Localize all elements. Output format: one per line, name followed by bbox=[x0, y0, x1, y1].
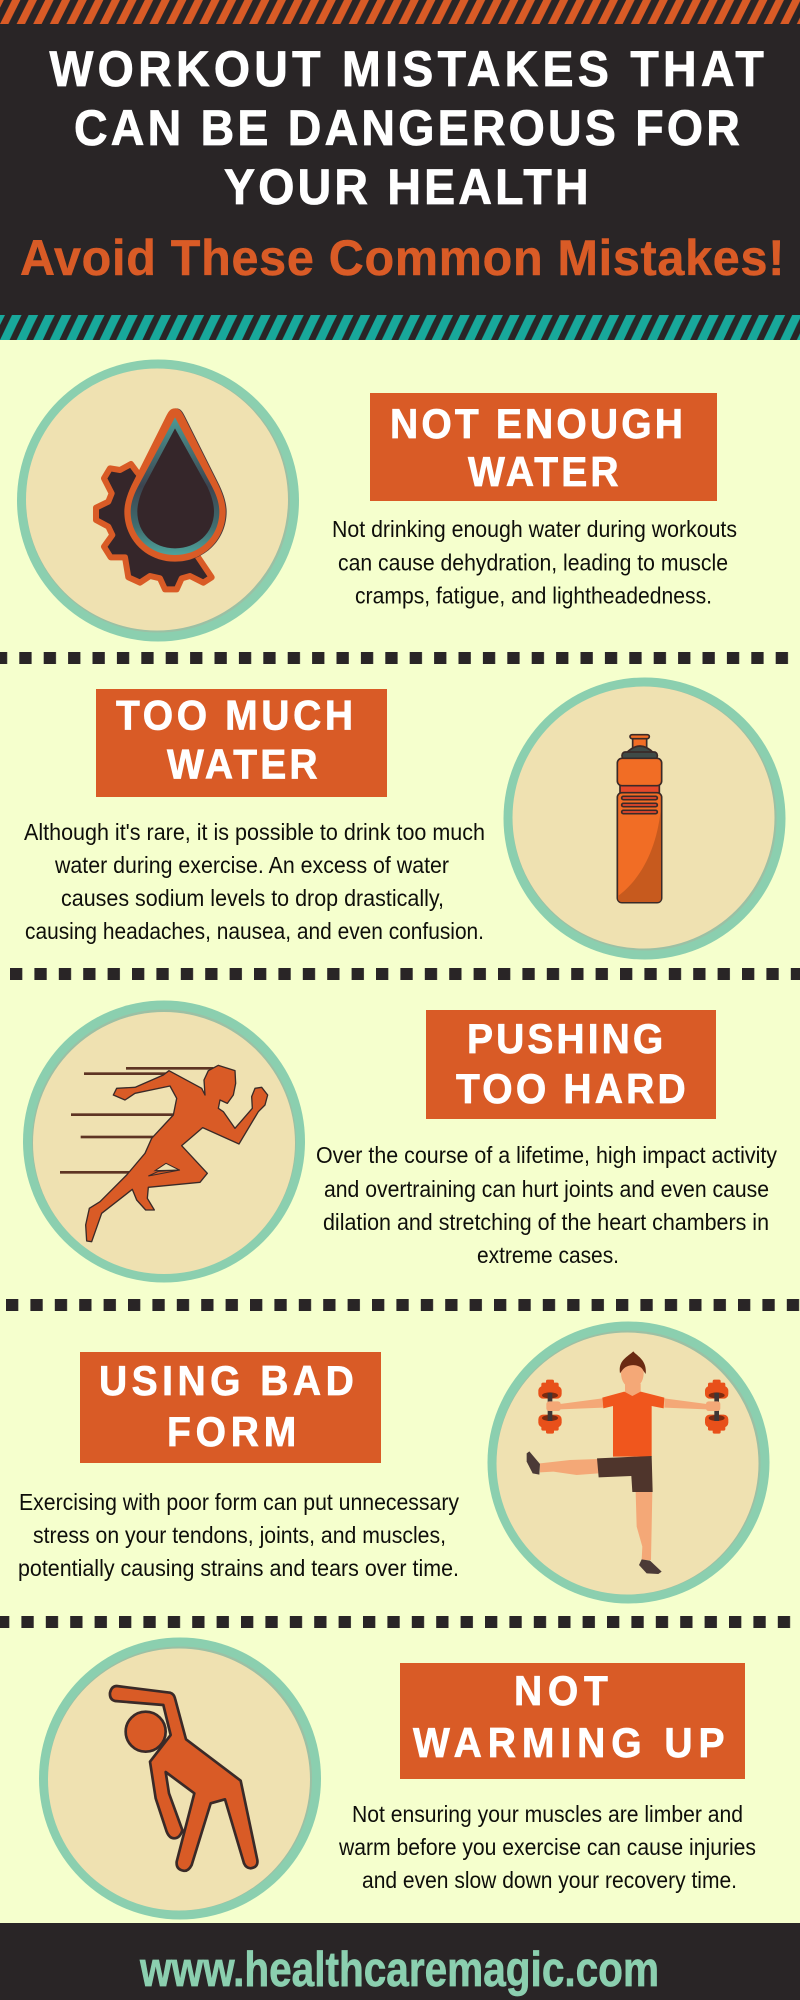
divider bbox=[0, 1616, 800, 1628]
subtitle: Avoid These Common Mistakes! bbox=[20, 230, 784, 286]
heading: too much water: TOO MUCH bbox=[116, 691, 353, 739]
text: not enough water bbox=[332, 516, 737, 608]
heading: using bad form: FORM bbox=[167, 1408, 296, 1455]
text: using bad form: Exercising with poor form can put unnecessary bbox=[19, 1489, 459, 1515]
heading: pushing too hard: PUSHING bbox=[467, 1015, 663, 1062]
heading: using bad form: USING BAD bbox=[99, 1357, 354, 1404]
heading: not warming up: WARMING UP bbox=[413, 1719, 725, 1766]
footer panel bbox=[0, 1923, 800, 2000]
section: not enough water bbox=[17, 360, 737, 642]
teal striped band bbox=[0, 315, 800, 340]
section: pushing too hard bbox=[23, 1000, 777, 1282]
text: pushing too hard: dilation and stretching of the heart chambers in bbox=[323, 1209, 769, 1235]
text: pushing too hard: Over the course of a lifetime, high impact activity bbox=[316, 1142, 777, 1168]
divider bbox=[0, 1299, 800, 1311]
orange striped band bbox=[0, 0, 800, 24]
section: not warming up bbox=[39, 1638, 756, 1920]
text: pushing too hard: and overtraining can hurt joints and even cause bbox=[324, 1176, 769, 1202]
icon: water drop and gear in circle bbox=[17, 360, 299, 642]
text: not enough water: Not drinking enough water during workouts bbox=[332, 516, 737, 542]
heading: not enough water: WATER bbox=[468, 448, 619, 495]
text: too much water bbox=[24, 819, 485, 944]
heading: not enough water: NOT ENOUGH bbox=[390, 400, 683, 447]
icon: side stretch figure in circle bbox=[39, 1638, 321, 1920]
heading: not enough water bbox=[370, 393, 717, 501]
heading: too much water bbox=[96, 689, 387, 797]
divider bbox=[0, 968, 800, 980]
icon: water bottle in circle bbox=[504, 678, 786, 960]
title bbox=[50, 41, 764, 215]
heading: pushing too hard bbox=[426, 1010, 716, 1119]
text: not warming up: warm before you exercise can cause injuries bbox=[338, 1834, 756, 1860]
heading: too much water: WATER bbox=[167, 740, 318, 788]
text: too much water: causes sodium levels to drop drastically, bbox=[61, 885, 444, 911]
website url: www.healthcaremagic.com bbox=[139, 1943, 659, 1997]
section: using bad form bbox=[18, 1322, 770, 1604]
text: using bad form bbox=[18, 1489, 459, 1581]
heading: using bad form bbox=[80, 1352, 381, 1463]
title: YOUR HEALTH bbox=[224, 159, 589, 215]
title: CAN BE DANGEROUS FOR bbox=[74, 100, 740, 156]
heading: not warming up bbox=[400, 1663, 745, 1779]
heading: not warming up: NOT bbox=[514, 1667, 608, 1714]
text: too much water: causing headaches, nausea, and even confusion. bbox=[25, 918, 484, 944]
text: not enough water: cramps, fatigue, and lightheadedness. bbox=[355, 582, 712, 608]
icon: sprinting runner in circle bbox=[23, 1000, 305, 1282]
text: pushing too hard: extreme cases. bbox=[477, 1242, 619, 1268]
text: too much water: water during exercise. An excess of water bbox=[54, 852, 449, 878]
text: not warming up: and even slow down your recovery time. bbox=[362, 1867, 737, 1893]
text: using bad form: potentially causing strains and tears over time. bbox=[18, 1555, 459, 1581]
left dumbbell bbox=[538, 1380, 562, 1434]
icon: man with dumbbells balancing in circle bbox=[488, 1322, 770, 1604]
text: not warming up bbox=[338, 1801, 756, 1893]
text: not warming up: Not ensuring your muscles are limber and bbox=[352, 1801, 743, 1827]
text: too much water: Although it's rare, it is possible to drink too much bbox=[24, 819, 485, 845]
right dumbbell bbox=[705, 1380, 728, 1434]
section: too much water bbox=[24, 678, 786, 960]
divider bbox=[0, 652, 800, 664]
text: pushing too hard bbox=[316, 1142, 777, 1268]
header panel bbox=[0, 0, 800, 340]
heading: pushing too hard: TOO HARD bbox=[456, 1065, 686, 1112]
text: not enough water: can cause dehydration, leading to muscle bbox=[338, 550, 728, 576]
text: using bad form: stress on your tendons, joints, and muscles, bbox=[33, 1522, 446, 1548]
title: WORKOUT MISTAKES THAT bbox=[50, 41, 764, 97]
